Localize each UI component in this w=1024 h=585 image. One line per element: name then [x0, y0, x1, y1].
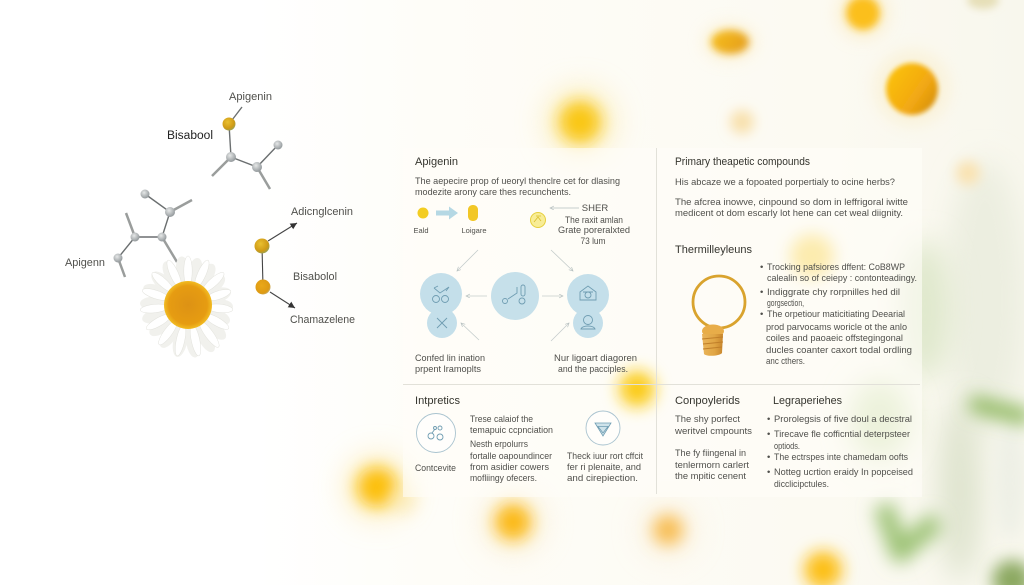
- bullet list: •: [767, 429, 770, 440]
- bullet list: anc cthers.: [766, 356, 805, 367]
- bullet list: •: [767, 452, 770, 463]
- caption right: [554, 353, 637, 375]
- molecule: right with arrows: [254, 223, 297, 308]
- label: Contcevite: Contcevite: [415, 463, 456, 474]
- heading: Primary: Primary theapetic compounds: [675, 156, 810, 168]
- caption left: prpent lramoplts: [415, 364, 481, 375]
- icon: yellow seed: [418, 208, 428, 218]
- caption right: Nur ligoart diagoren: [554, 353, 637, 364]
- text column: fortalle oapoundincer: [470, 451, 552, 462]
- bullet list: •: [767, 467, 770, 478]
- molecule: left Apigenin: [114, 190, 192, 277]
- label: Bisabool: Bisabool: [167, 130, 213, 142]
- blurred flower over panel: [619, 371, 655, 407]
- text column: Nesth erpolurrs: [470, 439, 528, 450]
- bullet list: ducles coanter caxort todal ordling: [766, 345, 912, 356]
- text block: weritvel cmpounts: [674, 426, 752, 437]
- label: Bisabolol: Bisabolol: [293, 271, 337, 283]
- bullet list: [767, 414, 913, 490]
- diagram arrows: [457, 250, 573, 341]
- label: Chamazelene: Chamazelene: [290, 314, 355, 326]
- bullet list: •: [767, 414, 770, 425]
- icon: yellow capsule: [468, 205, 478, 221]
- panel: Intpretics: [415, 395, 643, 484]
- text block: The afcrea inowve, cinpound so dom in leffrigoral iwitte: [675, 197, 908, 208]
- bullet list: [760, 262, 917, 367]
- text column: from asidier cowers: [470, 462, 549, 473]
- icon: yellow molecule blob: [530, 212, 546, 228]
- caption left: Confed lin ination: [415, 353, 485, 364]
- bullet list: Tirecave fle cofficntial deterpsteer: [774, 429, 910, 440]
- caption right: and the pacciples.: [558, 364, 628, 375]
- bullet list: coiles and paoaeic offstegingonal: [766, 333, 903, 344]
- text column 2: [567, 451, 643, 484]
- callout: SHER: 73 lum: [580, 236, 606, 247]
- text column 2: fer ri plenaite, and: [567, 462, 641, 473]
- bullet list: Notteg ucrtion eraidy In popceised: [774, 467, 913, 478]
- bullet list: Trocking pafsiores dffent: CoB8WP: [767, 262, 905, 273]
- text block: [674, 414, 752, 482]
- label: Apigenn: Apigenn: [65, 257, 105, 269]
- heading: Conpoylerids: Conpoylerids: [675, 395, 741, 407]
- chamomile flower: [140, 256, 233, 358]
- panel: Primary therapeutic compounds: [675, 156, 917, 367]
- heading: Intpretics: Intpretics: [415, 395, 460, 407]
- icon: light bulb: [693, 276, 745, 356]
- label: Apigenin: Apigenin: [229, 91, 272, 103]
- bullet list: dicclicipctules.: [774, 479, 829, 490]
- bullet list: calealin so of ceiepy : contonteadingy.: [767, 273, 917, 284]
- bullet list: The orpetiour maticitiating Deearial: [767, 309, 905, 320]
- arrow: pointer to SHER: [550, 207, 579, 209]
- panel: Legraperiehes: [767, 395, 913, 490]
- bullet list: Indiggrate chy rorpnilles hed dil: [767, 287, 900, 298]
- text block: tenlermorn carlert: [675, 460, 749, 471]
- molecule: top Apigenin: [212, 107, 282, 189]
- text column: Trese calaiof the: [470, 414, 533, 425]
- text block: the mpitic cenent: [675, 471, 746, 482]
- heading: Thermilleyleuns: Thermilleyleuns: [675, 244, 752, 256]
- callout: SHER: [558, 203, 630, 247]
- arrow: seed to ligand: [436, 206, 458, 220]
- text column 2: Theck iuur rort cffcit: [567, 451, 643, 462]
- bullet list: optiods.: [774, 441, 800, 452]
- infographic panel backdrop: [403, 148, 922, 497]
- text block: [675, 177, 908, 219]
- panel dividers: [403, 148, 920, 494]
- caption left: [415, 353, 485, 375]
- text block: The shy porfect: [675, 414, 740, 425]
- label: Eald: Eald: [413, 226, 429, 235]
- bullet list: •: [760, 309, 763, 320]
- bullet list: Prorolegsis of five doul a decstral: [774, 414, 912, 425]
- heading: Legraperiehes: Legraperiehes: [773, 395, 842, 407]
- callout: SHER: The raxit amlan: [565, 215, 623, 226]
- icon: molecules circle: [416, 414, 456, 452]
- label: Adicnglcenin: Adicnglcenin: [291, 206, 353, 218]
- text column: mofliingy ofecers.: [470, 473, 537, 484]
- heading: Apigenin: Apigenin: [415, 156, 458, 168]
- intro text: [415, 176, 620, 198]
- text block: The fy fiingenal in: [675, 448, 746, 459]
- bullet list: •: [760, 262, 763, 273]
- bullet list: gorgsection,: [767, 298, 804, 309]
- intro text: modezite arony care thes recunchents.: [415, 187, 571, 198]
- icon: triangle circle: [586, 411, 620, 445]
- label: Loigare: Loigare: [461, 226, 487, 235]
- diagram: circular nodes: [420, 272, 609, 338]
- text column: [470, 414, 553, 484]
- text block: His abcaze we a fopoated porpertialy to ocine herbs?: [675, 177, 895, 188]
- intro text: The aepecire prop of ueoryl thenclre cet for dlasing: [415, 176, 620, 187]
- bullet list: •: [760, 287, 763, 298]
- text column: temapuic ccpnciation: [470, 425, 553, 436]
- panel: Conpoylerids: [674, 395, 752, 482]
- bullet list: The ectrspes inte chamedam oofts: [774, 452, 908, 463]
- panel: Apigenin pathway: [413, 156, 637, 375]
- bullet list: prod parvocams woricle ot the anlo: [766, 322, 907, 333]
- callout: SHER: Grate poreralxted: [558, 225, 630, 236]
- text block: medicent ot dom escarly lot hene can cet weal diignity.: [675, 208, 903, 219]
- callout: SHER: SHER: [582, 203, 608, 214]
- text column 2: and cirepiection.: [567, 473, 638, 484]
